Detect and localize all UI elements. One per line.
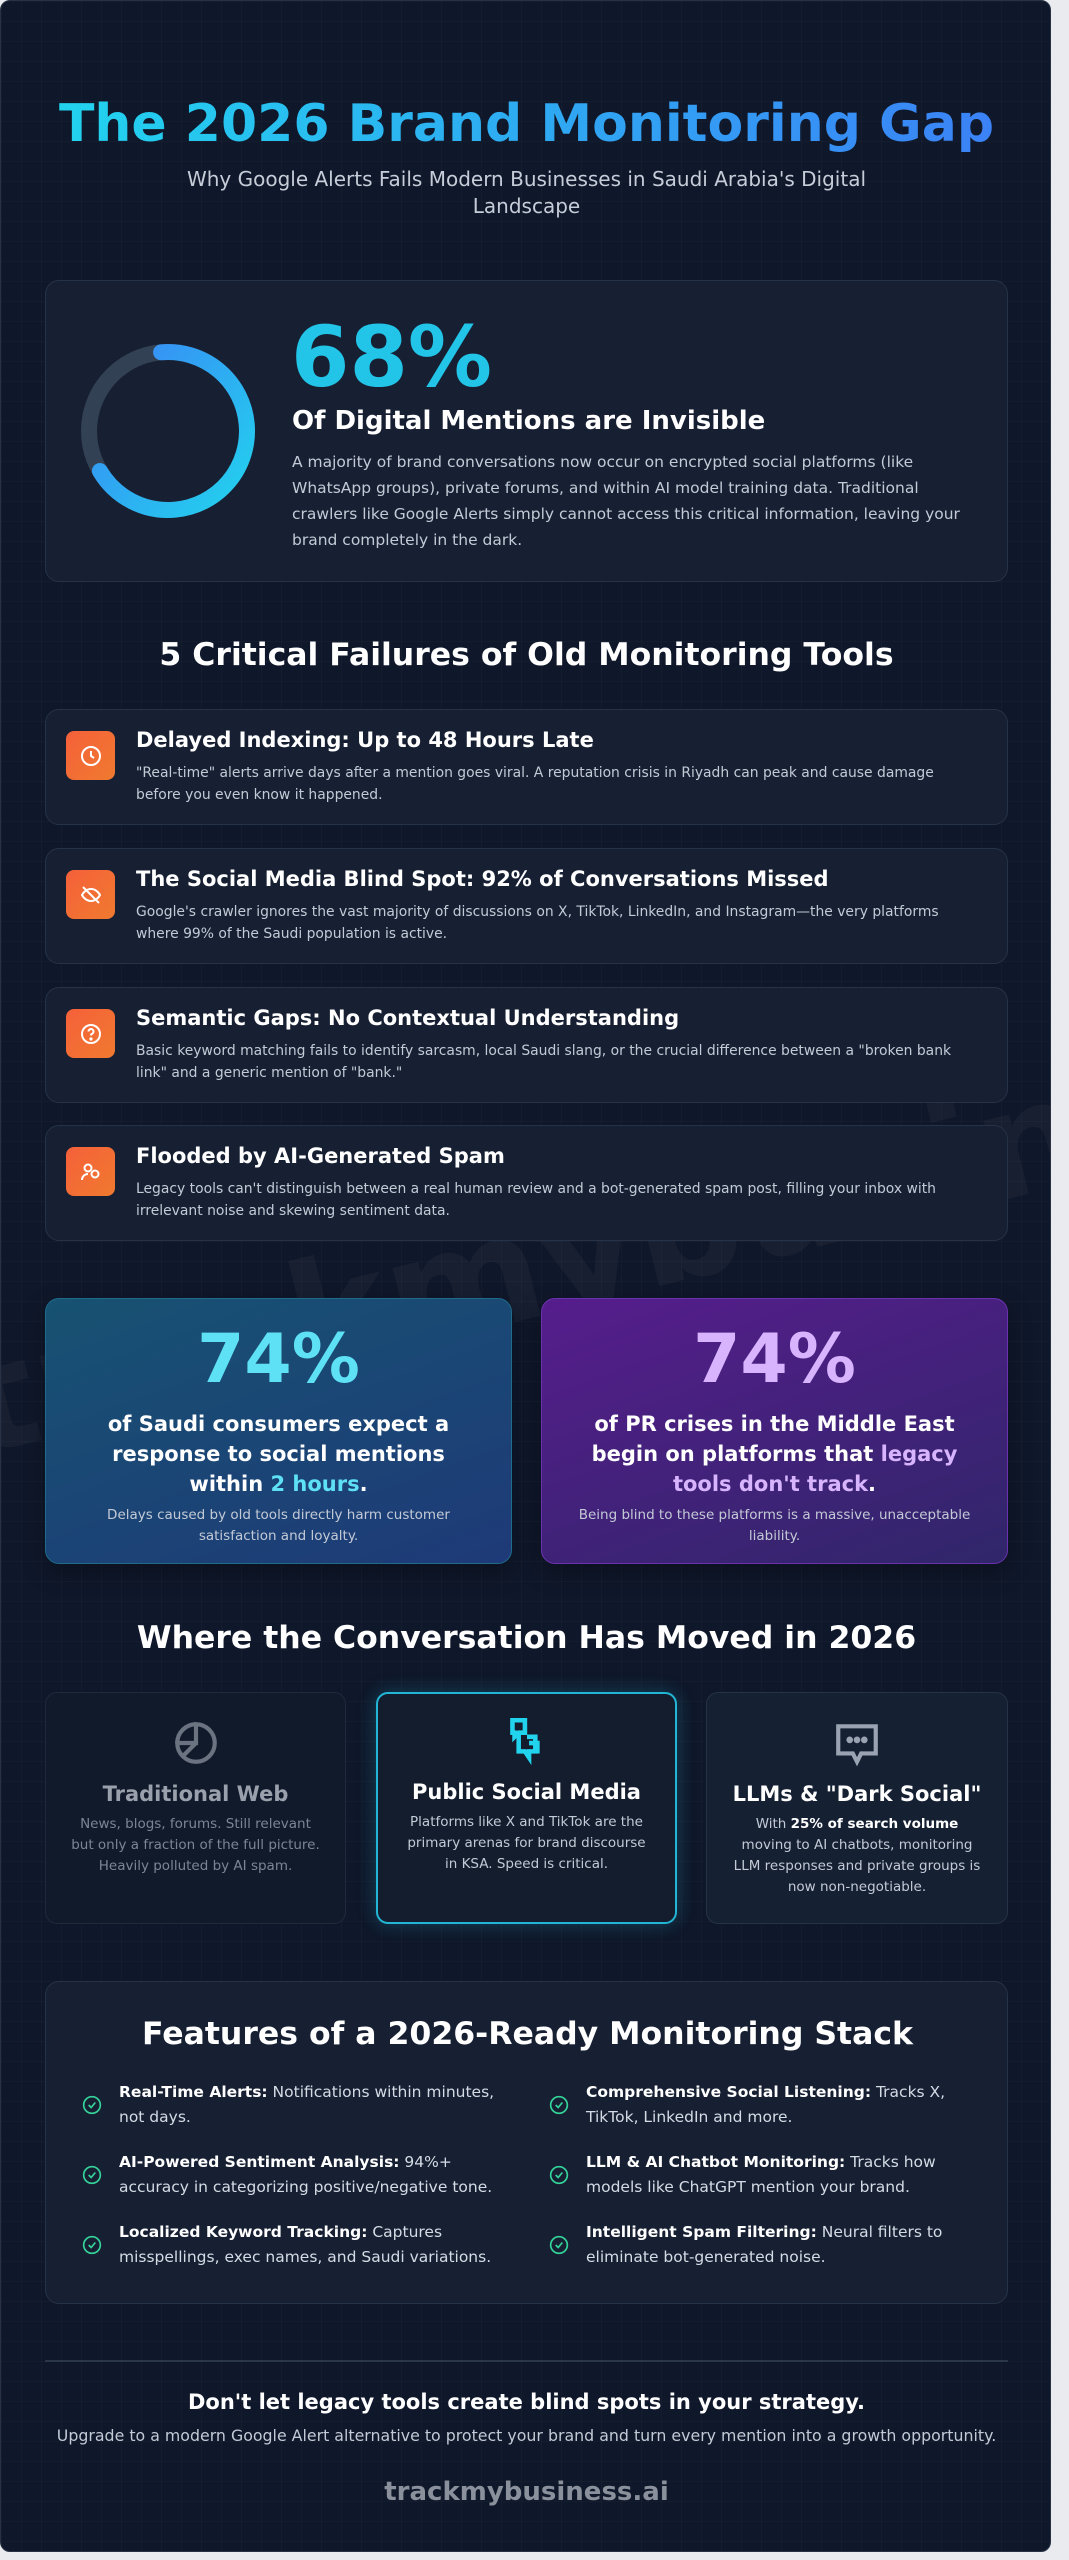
panel: 68% stat bbox=[45, 280, 1008, 582]
failure card 4: Flooded by AI-Generated Spam bbox=[136, 1144, 505, 1168]
stat box: 74% PR crises: of PR crises in the Middle East begin on platforms that legacy tools don't track. bbox=[592, 1412, 957, 1496]
subtitle: Why Google Alerts Fails Modern Businesses in Saudi Arabia's Digital Landscape bbox=[187, 167, 866, 218]
feature list: Localized Keyword Tracking: Captures misspellings, exec names, and Saudi variations. bbox=[119, 2223, 491, 2266]
card: LLMs dark social bbox=[706, 1692, 1008, 1924]
failure card 2: Google's crawler ignores the vast majority of discussions on X, TikTok, LinkedIn, and Instagram—the very platforms where 99% of the Saudi population is active. bbox=[136, 904, 939, 942]
features heading: Features of a 2026-Ready Monitoring Stack bbox=[142, 2016, 913, 2052]
failure card 4 bbox=[45, 1125, 1008, 1241]
failure card 3: Semantic Gaps: No Contextual Understanding bbox=[136, 1006, 679, 1030]
feature list: LLM & AI Chatbot Monitoring: Tracks how models like ChatGPT mention your brand. bbox=[586, 2153, 936, 2196]
card: public social media: Public Social Media bbox=[412, 1780, 641, 1804]
card: public social media: Platforms like X and TikTok are the primary arenas for brand discourse in KSA. Speed is critical. bbox=[407, 1814, 646, 1872]
failure card 1: Delayed Indexing: Up to 48 Hours Late bbox=[136, 728, 594, 752]
card: traditional web bbox=[45, 1692, 346, 1924]
footer text: Upgrade to a modern Google Alert alternative to protect your brand and turn every mention into a growth opportunity. bbox=[57, 2426, 996, 2445]
footer heading: Don't let legacy tools create blind spots in your strategy. bbox=[188, 2390, 865, 2414]
stat box: 74% consumers: of Saudi consumers expect a response to social mentions within 2 hours. bbox=[108, 1412, 449, 1496]
feature list: Intelligent Spam Filtering: Neural filters to eliminate bot-generated noise. bbox=[586, 2223, 942, 2266]
stat heading: Of Digital Mentions are Invisible bbox=[292, 406, 765, 436]
failure card 1 bbox=[45, 709, 1008, 825]
panel: features bbox=[45, 1981, 1008, 2304]
icon: chat bubbles bbox=[510, 1718, 540, 1765]
failure card 3 bbox=[45, 987, 1008, 1103]
icon: chat dots bbox=[836, 1724, 878, 1766]
icon: eye off bbox=[66, 870, 115, 919]
title: The 2026 Brand Monitoring Gap bbox=[59, 94, 994, 154]
icon: question bbox=[66, 1009, 115, 1058]
feature list bbox=[82, 2083, 945, 2266]
failure card 3: Basic keyword matching fails to identify sarcasm, local Saudi slang, or the crucial difference between a "broken bank link" and a generic mention of "bank." bbox=[136, 1043, 951, 1081]
donut chart bbox=[81, 344, 255, 518]
card: LLMs dark social: With 25% of search volume bbox=[756, 1816, 958, 1832]
card: traditional web: Traditional Web bbox=[103, 1782, 288, 1806]
icon: clock bbox=[66, 731, 115, 780]
icon: web bbox=[175, 1722, 217, 1764]
big number: 68% bbox=[291, 308, 492, 406]
feature list: Comprehensive Social Listening: Tracks X, TikTok, LinkedIn and more. bbox=[586, 2083, 945, 2126]
brand: trackmybusiness.ai bbox=[384, 2477, 669, 2507]
stat box: 74% PR crises: Being blind to these platforms is a massive, unacceptable liability. bbox=[579, 1507, 970, 1544]
feature list: AI-Powered Sentiment Analysis: 94%+ accuracy in categorizing positive/negative tone. bbox=[119, 2153, 492, 2196]
card: LLMs dark social: moving to AI chatbots, monitoring LLM responses and private groups is now non-negotiable. bbox=[734, 1837, 980, 1895]
stat box: 74% consumers bbox=[45, 1298, 512, 1564]
failure card 2: The Social Media Blind Spot: 92% of Conversations Missed bbox=[136, 867, 829, 891]
failure card 1: "Real-time" alerts arrive days after a mention goes viral. A reputation crisis in Riyadh can peak and cause damage before you even know it happened. bbox=[136, 765, 934, 803]
stat box: 74% PR crises bbox=[541, 1298, 1008, 1564]
card: public social media bbox=[376, 1692, 677, 1924]
icon: users bbox=[66, 1147, 115, 1196]
heading: conversation moved: Where the Conversation Has Moved in 2026 bbox=[137, 1620, 916, 1656]
stat text: A majority of brand conversations now occur on encrypted social platforms (like WhatsApp groups), private forums, and within AI model training data. Traditional crawlers like Google Alerts simply cannot access this critical information, leaving your brand completely in the dark. bbox=[292, 453, 960, 549]
stat box: 74% PR crises: 74% bbox=[693, 1320, 856, 1399]
feature list: Real-Time Alerts: Notifications within minutes, not days. bbox=[119, 2083, 494, 2126]
stat box: 74% consumers: 74% bbox=[197, 1320, 360, 1399]
card: LLMs dark social: LLMs & "Dark Social" bbox=[733, 1782, 981, 1806]
failure card 2 bbox=[45, 848, 1008, 964]
failure card 4: Legacy tools can't distinguish between a real human review and a bot-generated spam post, filling your inbox with irrelevant noise and skewing sentiment data. bbox=[136, 1181, 936, 1219]
heading: failures: 5 Critical Failures of Old Monitoring Tools bbox=[159, 637, 894, 673]
card: traditional web: News, blogs, forums. Still relevant but only a fraction of the full picture. Heavily polluted by AI spam. bbox=[71, 1816, 320, 1874]
stat box: 74% consumers: Delays caused by old tools directly harm customer satisfaction and loyalty. bbox=[107, 1507, 450, 1544]
